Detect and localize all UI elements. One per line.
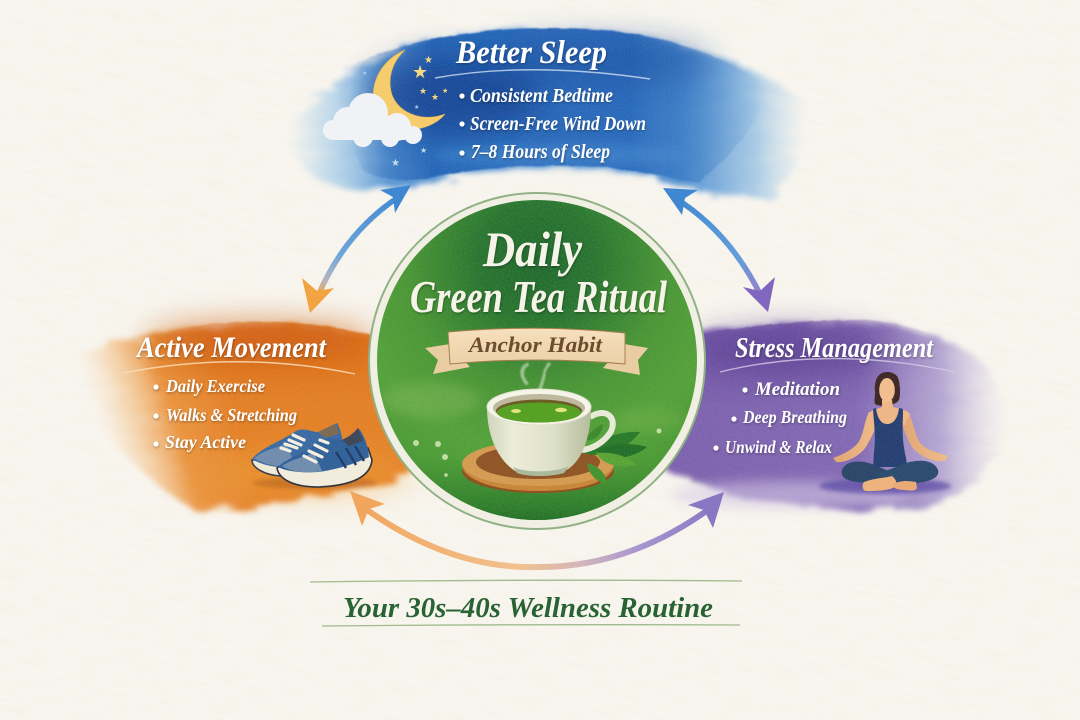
icon: stars: [339, 55, 448, 169]
arrow: sleep to stress: [663, 188, 775, 312]
list: active movement items: Walks & Stretching: [166, 405, 297, 425]
crossed legs: [842, 462, 897, 483]
list: active movement items: Daily Exercise: [165, 376, 265, 396]
icon: stars: ★: [431, 92, 439, 102]
shoelaces: [281, 435, 328, 462]
arrow: movement to stress: [350, 491, 724, 567]
icon: stars: ★: [414, 104, 419, 111]
heading: active movement: Active Movement: [135, 331, 327, 364]
icon: stars: ★: [419, 86, 427, 96]
blue brush band: [285, 28, 808, 200]
leaves: [583, 424, 647, 485]
list: better sleep items: [459, 85, 646, 163]
cup body: [487, 407, 591, 472]
arms: [833, 412, 878, 462]
list: stress management items: [713, 379, 847, 457]
orange brush band: [52, 322, 420, 510]
purple brush band: [665, 320, 1004, 510]
cup rim: [487, 389, 591, 425]
list: active movement items: [153, 376, 297, 452]
hair: [874, 372, 900, 406]
list: better sleep items: Screen-Free Wind Down: [470, 113, 646, 135]
outer ring: [369, 193, 705, 529]
icon: stars: ★: [442, 87, 448, 95]
sparkles: [413, 428, 662, 477]
icon: running shoes: [252, 423, 377, 489]
panel: stress management: [665, 320, 1004, 510]
icon: stars: ★: [362, 70, 367, 77]
title: daily: Daily: [482, 221, 583, 277]
cup foot: [513, 466, 569, 476]
icon: meditating woman: [819, 372, 951, 494]
ribbon label: Anchor Habit: [467, 332, 603, 357]
heading: better sleep: Better Sleep: [455, 35, 607, 71]
ribbon banner: [425, 328, 648, 375]
icon: stars: ★: [412, 62, 428, 82]
icon: stars: ★: [420, 146, 427, 155]
icon: crescent moon: [373, 50, 445, 130]
face: [879, 378, 895, 402]
list: active movement items: Stay Active: [165, 432, 246, 452]
panel: better sleep: [285, 28, 808, 200]
list: stress management items: Unwind & Relax: [725, 437, 832, 457]
list: stress management items: Meditation: [754, 379, 840, 400]
list: better sleep items: 7–8 Hours of Sleep: [471, 141, 610, 163]
icon: stars: ★: [339, 93, 344, 100]
footer rule top: [310, 580, 742, 582]
feet: [863, 476, 896, 491]
footer rule bottom: [322, 625, 740, 626]
central badge: daily green tea ritual: [369, 193, 710, 529]
tank top: [873, 408, 907, 467]
list: better sleep items: Consistent Bedtime: [470, 85, 613, 107]
icon: stars: ★: [424, 55, 433, 66]
list: stress management items: Deep Breathing: [742, 407, 847, 427]
back shoe: [252, 423, 343, 476]
steam: [522, 363, 550, 390]
green disc: [377, 200, 697, 520]
icon: stars: ★: [391, 158, 400, 169]
front shoe: [277, 428, 372, 487]
panel: active movement: [52, 322, 420, 510]
arrow: sleep to movement: [302, 185, 411, 313]
wooden coaster: [462, 441, 614, 493]
neck and shoulders: [868, 400, 910, 425]
heading: stress management: Stress Management: [735, 333, 934, 364]
cup handle: [582, 413, 613, 450]
green tea: [497, 402, 581, 422]
icon: cloud: [323, 93, 422, 147]
icon: tea cup on wooden coaster: [462, 363, 647, 493]
title: green tea ritual: Green Tea Ritual: [410, 271, 667, 322]
footer title: Your 30s–40s Wellness Routine: [343, 592, 713, 624]
grass texture: [370, 200, 710, 525]
